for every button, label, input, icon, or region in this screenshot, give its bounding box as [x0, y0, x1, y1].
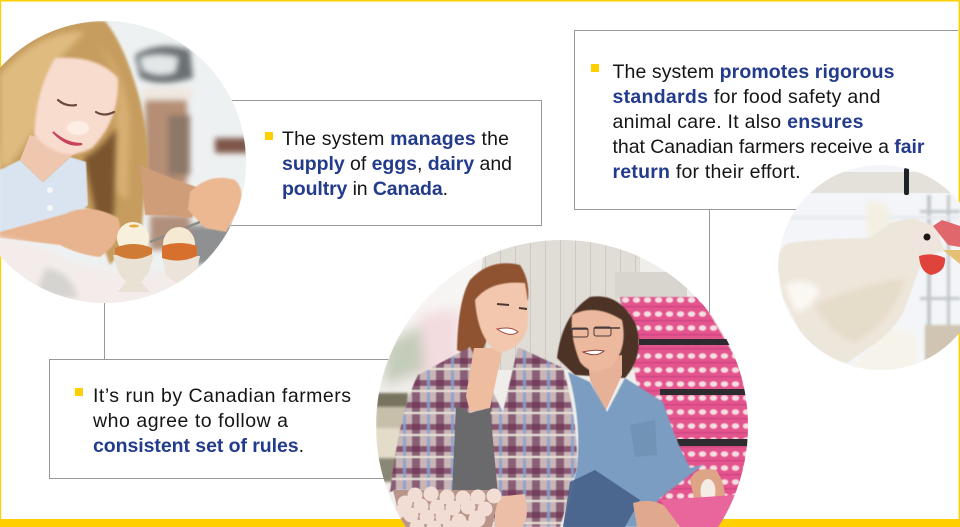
hen wattle	[919, 254, 945, 275]
woman left: grey tee	[452, 405, 498, 495]
arms and hands	[140, 165, 196, 218]
face	[34, 58, 118, 154]
woman right: face	[572, 310, 624, 371]
hen face	[927, 222, 940, 240]
shirt buttons	[47, 187, 53, 193]
hen eye	[924, 234, 930, 240]
hair	[0, 21, 148, 265]
tray of eggs	[392, 486, 502, 527]
connector: standards box to farmers photo	[708, 209, 710, 320]
bullet	[265, 132, 273, 140]
woman right: denim shirt	[563, 372, 703, 527]
panel: supply management	[225, 100, 542, 226]
text block: standards: that Canadian farmers receive a fair	[612, 136, 925, 158]
woman left: face	[475, 283, 528, 352]
panel: run by farmers	[50, 360, 400, 478]
bullet	[591, 64, 599, 72]
text block: farmers	[92, 385, 351, 457]
woman right: hair	[557, 296, 639, 378]
panel: standards	[574, 30, 958, 210]
hen comb	[933, 220, 960, 247]
shirt	[0, 157, 88, 234]
egg stacks	[620, 297, 760, 527]
text block: farmers: who agree to follow a	[92, 410, 288, 432]
text block: standards	[612, 61, 925, 183]
hands	[690, 469, 725, 498]
text block: standards: animal care. It also ensures	[612, 111, 864, 133]
woman left: plaid shirt	[390, 347, 577, 527]
woman left: hair	[457, 263, 528, 360]
text block: farmers: It’s run by Canadian farmers	[93, 385, 351, 407]
neck	[20, 135, 80, 182]
eggs in cups	[113, 222, 200, 292]
connector: girl photo to rules box	[104, 300, 106, 360]
text block: supply: poultry in Canada.	[282, 178, 448, 200]
spoon	[150, 222, 200, 242]
text block: standards: return for their effort.	[612, 161, 800, 183]
woman right: neck	[588, 355, 622, 412]
text block: supply: The system manages the	[282, 128, 509, 150]
blurred hen behind	[866, 202, 892, 240]
hen body	[778, 219, 945, 363]
machinery left	[376, 393, 408, 482]
woman left: neck and chest	[466, 348, 503, 412]
photo: girl eating boiled eggs	[0, 21, 246, 303]
text block: farmers: consistent set of rules.	[93, 435, 304, 457]
photo: two farmers with egg trays	[370, 235, 764, 527]
bullet	[75, 388, 83, 396]
text block: standards: standards for food safety and	[612, 86, 880, 108]
tray in right hand	[660, 495, 735, 527]
hen beak	[943, 250, 960, 264]
photo: white hen	[775, 160, 960, 375]
egg in hand	[700, 479, 716, 498]
text block: supply	[282, 128, 512, 200]
text block: supply: supply of eggs, dairy and	[282, 153, 512, 175]
text block: standards: The system promotes rigorous	[612, 61, 895, 83]
table	[0, 235, 32, 274]
